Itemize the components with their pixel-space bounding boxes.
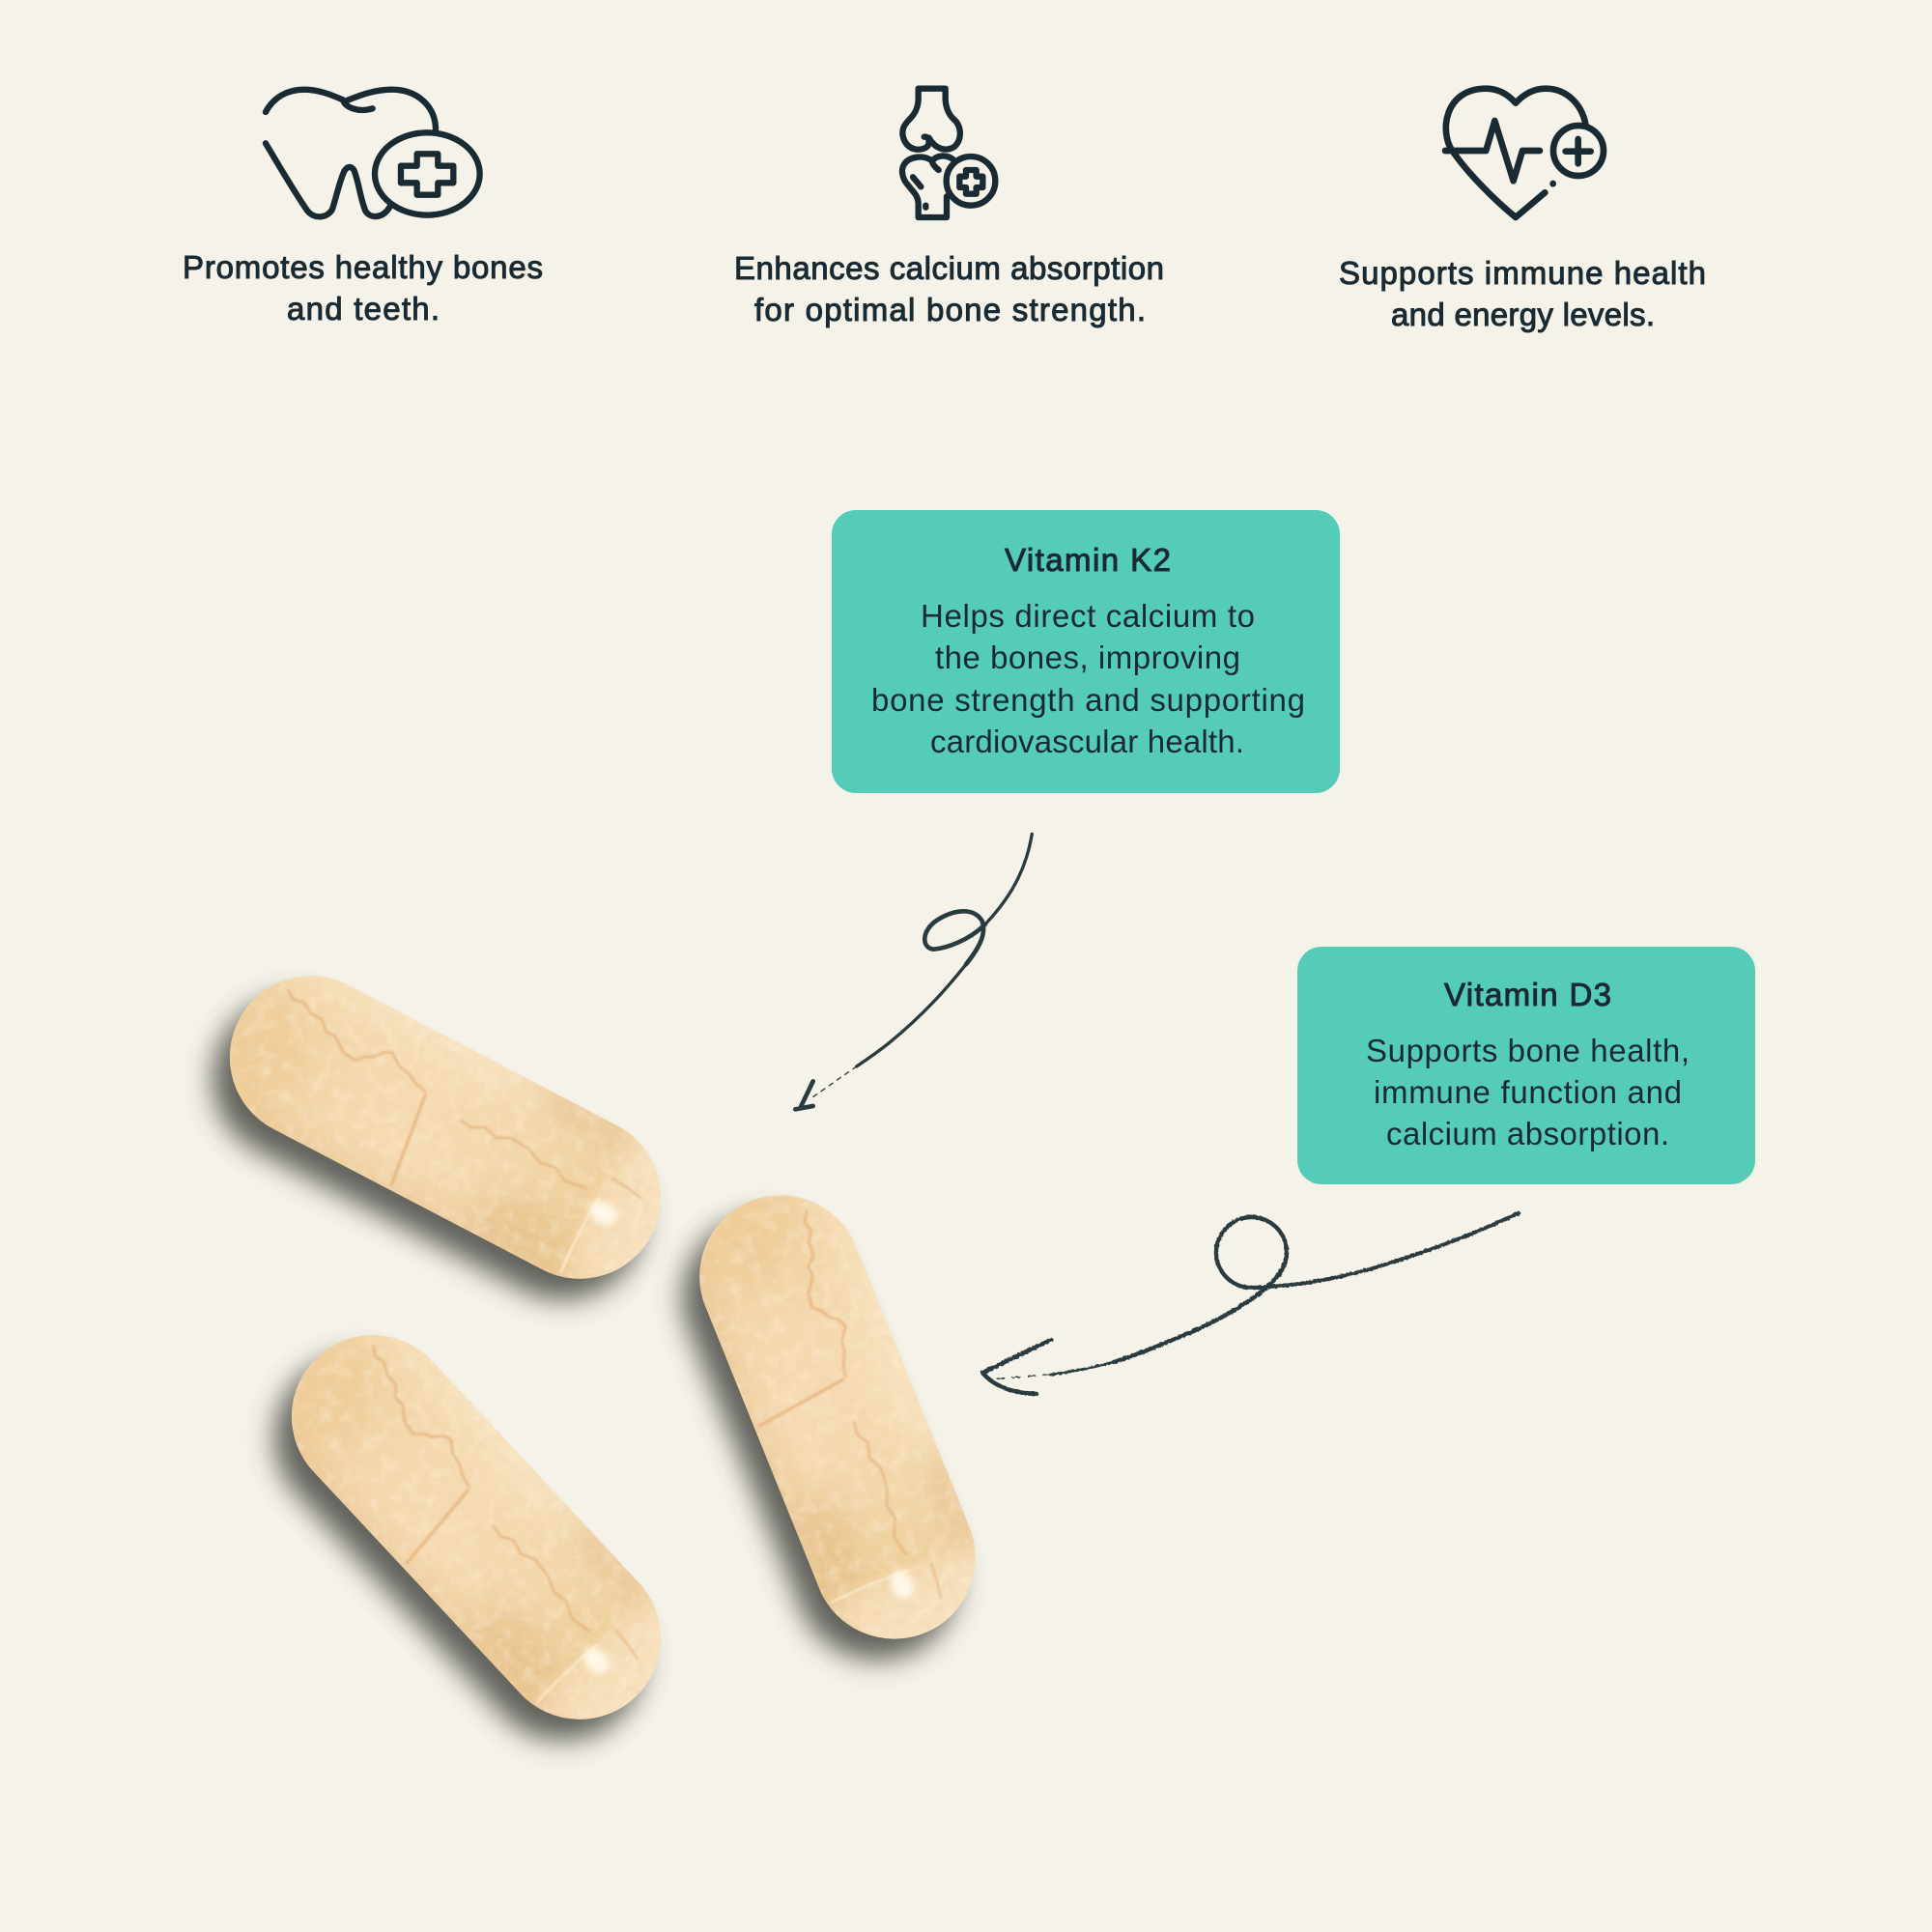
benefit: immune health [1339, 89, 1706, 332]
caption: immune health [1339, 255, 1706, 332]
benefit: calcium absorption [734, 89, 1164, 327]
caption: immune health: Supports immune health [1339, 255, 1706, 291]
text: Vitamin D3 description: calcium absorption. [1386, 1116, 1669, 1151]
panel: Vitamin K2 [832, 510, 1340, 793]
caption: bones and teeth [183, 249, 543, 327]
caption: calcium absorption: Enhances calcium absorption [734, 250, 1164, 286]
icon: bone joint with plus [902, 89, 995, 217]
caption: calcium absorption: for optimal bone strength. [754, 292, 1146, 327]
text: Vitamin K2 description: bone strength and supporting [871, 682, 1305, 718]
panel: Vitamin D3 [1297, 947, 1755, 1184]
caption: bones and teeth: and teeth. [287, 291, 440, 327]
capsule: bottom left [241, 1297, 699, 1775]
text: Vitamin K2 description [871, 598, 1305, 759]
text: Vitamin D3 description: immune function and [1374, 1074, 1682, 1110]
arrow: Vitamin K2 to capsules [795, 834, 1032, 1109]
benefit: bones and teeth [183, 90, 543, 327]
caption: bones and teeth: Promotes healthy bones [183, 249, 543, 285]
caption: calcium absorption [734, 250, 1164, 327]
caption: immune health: and energy levels. [1391, 297, 1655, 332]
icon: heart with pulse and plus [1445, 89, 1604, 217]
heading: Vitamin D3: Vitamin D3 [1444, 977, 1611, 1012]
icon: tooth with plus [266, 90, 480, 216]
infographic canvas [185, 85, 1755, 1760]
text: Vitamin D3 description [1366, 1033, 1690, 1151]
arrow: Vitamin D3 to capsules [982, 1213, 1519, 1394]
capsule: right [658, 1168, 1007, 1685]
text: Vitamin K2 description: cardiovascular health. [930, 724, 1244, 759]
text: Vitamin K2 description: the bones, improving [935, 639, 1240, 675]
capsule: top left [185, 942, 693, 1328]
text: Vitamin D3 description: Supports bone health, [1366, 1033, 1690, 1068]
text: Vitamin K2 description: Helps direct calcium to [921, 598, 1255, 634]
heading: Vitamin K2: Vitamin K2 [1005, 542, 1171, 578]
